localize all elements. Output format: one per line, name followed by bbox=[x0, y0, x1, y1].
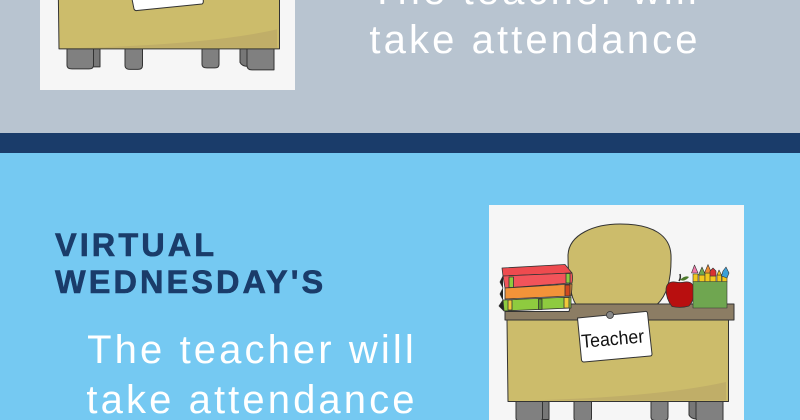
icon: crayon box bbox=[692, 264, 729, 308]
illustration: cropped teacher desk, top panel bbox=[40, 0, 295, 90]
icon: teacher name sign bbox=[578, 311, 652, 362]
icon: teacher name sign: Teacher bbox=[580, 326, 646, 353]
text: top panel attendance note: take attendance bbox=[369, 18, 701, 62]
text: bottom panel attendance note: The teacher will bbox=[87, 328, 417, 372]
heading: virtual wednesday's: WEDNESDAY'S bbox=[55, 264, 326, 300]
icon: stacked books bbox=[499, 264, 572, 311]
illustration: teacher desk, bottom panel bbox=[489, 205, 744, 420]
icon: red apple bbox=[666, 274, 694, 307]
dark navy divider band bbox=[0, 133, 800, 153]
top panel background bbox=[0, 0, 800, 133]
heading: virtual wednesday's: VIRTUAL bbox=[55, 227, 217, 263]
bottom panel background bbox=[0, 153, 800, 420]
